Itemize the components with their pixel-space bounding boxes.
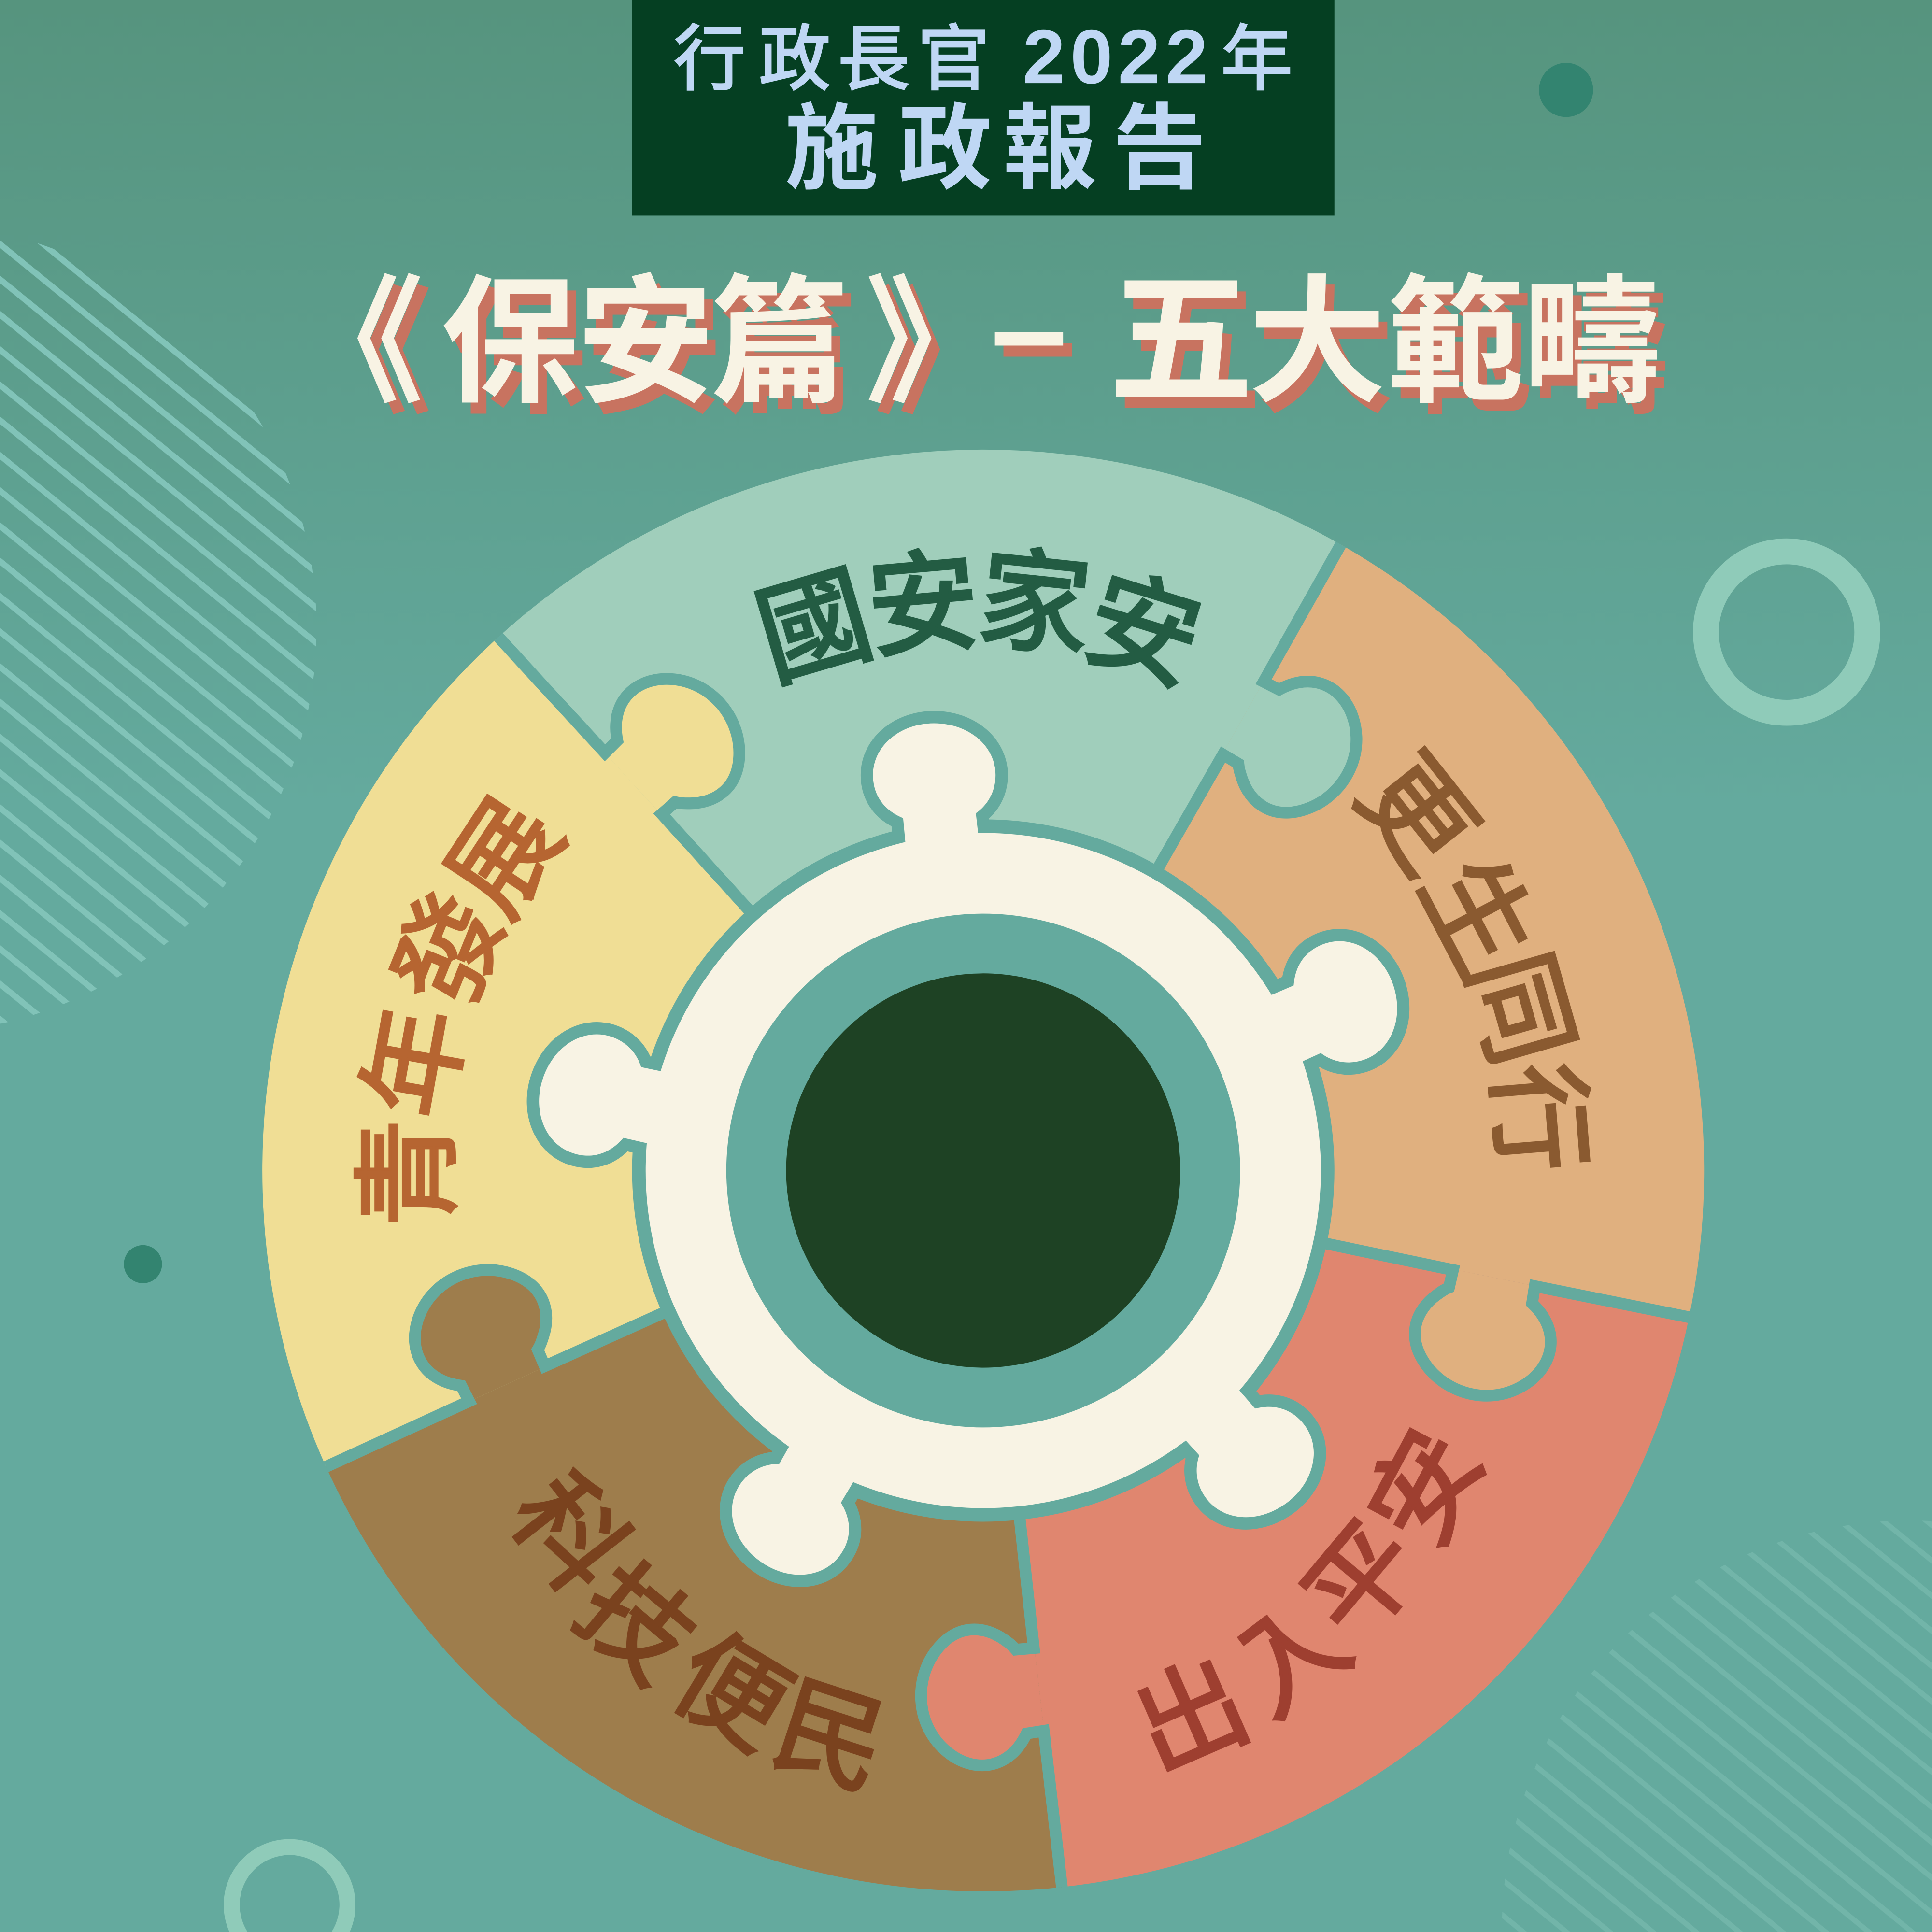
label: 出入平安 <box>1118 1411 1505 1794</box>
header line 1: 年 <box>1221 19 1293 99</box>
decoration: dot left <box>124 1245 162 1283</box>
puzzle tab: tan <box>1326 1096 1689 1464</box>
puzzle tab: salmon <box>859 1519 1222 1887</box>
label: 更生同行: 行 <box>1474 1059 1603 1177</box>
header banner <box>632 0 1335 215</box>
header line 1: 2022 <box>1023 14 1208 99</box>
title shadow: – <box>999 262 1076 416</box>
label: 青年發展 <box>347 779 585 1227</box>
central hub <box>524 723 1412 1597</box>
segment: rehabilitation <box>834 487 1779 1511</box>
label: 出入平安: 平 <box>1281 1500 1444 1661</box>
title text: 大範疇 <box>1248 266 1661 420</box>
segment: safe travel <box>694 885 1799 1932</box>
header line 1: 行政長官 <box>674 19 989 99</box>
label: 國安家安: 國 <box>743 552 885 702</box>
label: 更生同行 <box>1335 734 1603 1177</box>
title shadow: 大範疇 <box>1257 277 1670 431</box>
title text: 《保安篇》 <box>286 266 1003 420</box>
puzzle tab: mint <box>1081 544 1418 867</box>
puzzle wheel <box>148 450 1799 1932</box>
title text <box>286 251 1661 422</box>
label: 更生同行: 更 <box>1335 734 1498 894</box>
label: 出入平安: 入 <box>1211 1577 1371 1738</box>
label: 出入平安: 出 <box>1118 1640 1265 1794</box>
puzzle tab: brown <box>326 1229 663 1551</box>
segment: technology <box>270 960 1376 1932</box>
title text: – <box>991 251 1067 405</box>
title <box>286 251 1670 433</box>
label: 國安家安: 家 <box>973 536 1096 671</box>
label: 青年發展: 展 <box>425 779 585 936</box>
label: 國安家安: 安 <box>1072 554 1215 706</box>
label: 青年發展: 年 <box>347 998 485 1126</box>
label: 更生同行: 生 <box>1398 838 1556 991</box>
title text: 五 <box>1108 259 1254 422</box>
label: 出入平安: 安 <box>1347 1411 1505 1564</box>
label: 青年發展: 發 <box>374 878 527 1024</box>
label: 國安家安 <box>743 536 1215 706</box>
decoration: ring right <box>1706 552 1867 713</box>
title shadow: 五 <box>1117 270 1263 433</box>
label: 科技便民: 技 <box>555 1543 717 1705</box>
segment: national security <box>498 450 1341 1170</box>
label: 青年發展: 青 <box>348 1119 469 1227</box>
decoration: ring bottom left <box>224 1839 355 1932</box>
label: 更生同行: 同 <box>1447 940 1593 1078</box>
label: 國安家安: 安 <box>863 538 984 671</box>
label: 科技便民: 民 <box>760 1662 901 1811</box>
puzzle tab: yellow <box>498 637 749 910</box>
title shadow <box>295 262 1670 433</box>
decoration: striped circle bottom right <box>1502 1520 1932 1932</box>
label: 科技便民 <box>488 1453 901 1811</box>
decoration: striped circle left <box>0 233 316 1024</box>
header line 1 <box>674 14 1293 99</box>
segment: youth development <box>148 608 1094 1632</box>
label: 科技便民: 便 <box>654 1612 809 1772</box>
title shadow: 《保安篇》 <box>295 277 1011 431</box>
decoration: dot top right <box>1539 63 1593 117</box>
label: 科技便民: 科 <box>488 1453 650 1614</box>
header line 2: 施政報告 <box>785 97 1206 201</box>
